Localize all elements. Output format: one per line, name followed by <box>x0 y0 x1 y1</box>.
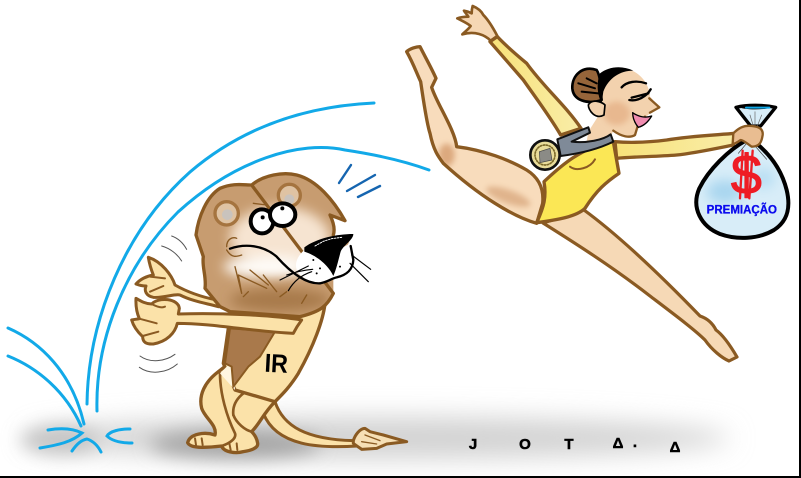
leotard <box>537 142 619 223</box>
shaking lines <box>139 236 187 372</box>
extended arm <box>615 133 735 158</box>
IR label: IR <box>264 348 289 379</box>
signature: Δ <box>613 435 624 452</box>
ground shadow <box>20 417 730 459</box>
water splash <box>40 429 132 452</box>
hind legs <box>188 360 297 453</box>
mouth <box>633 113 652 127</box>
brow and closed eye <box>622 82 651 100</box>
body <box>220 303 325 402</box>
eyes <box>251 203 295 233</box>
gymnast <box>407 6 788 238</box>
raised arm and hand <box>457 6 581 135</box>
prize label: PREMIAÇÃO <box>707 202 777 217</box>
signature: O <box>519 436 531 453</box>
bag <box>696 105 788 238</box>
holding hand <box>733 126 763 147</box>
chest mane <box>225 328 275 387</box>
raised leg <box>407 47 543 223</box>
lion <box>132 174 407 453</box>
signature: Δ <box>670 439 681 456</box>
dollar sign: $ <box>731 143 762 206</box>
dollar bars <box>740 151 753 198</box>
tail <box>263 402 407 449</box>
front arm and paw <box>132 298 302 344</box>
impact dashes <box>339 165 380 197</box>
ear <box>588 101 605 116</box>
signature: . <box>633 434 637 451</box>
water jet arcs <box>8 103 429 426</box>
medal <box>530 140 560 170</box>
signature: T <box>564 436 574 453</box>
head and neck <box>572 67 659 142</box>
medal ribbon <box>557 127 613 156</box>
signature <box>469 434 681 456</box>
muzzle <box>230 234 371 291</box>
back arm <box>136 257 218 307</box>
signature: J <box>469 436 477 453</box>
hair <box>598 67 633 103</box>
ears <box>215 184 300 225</box>
rear leg (lower) <box>543 210 737 361</box>
hair bun <box>572 69 602 102</box>
mane and head <box>196 174 350 317</box>
